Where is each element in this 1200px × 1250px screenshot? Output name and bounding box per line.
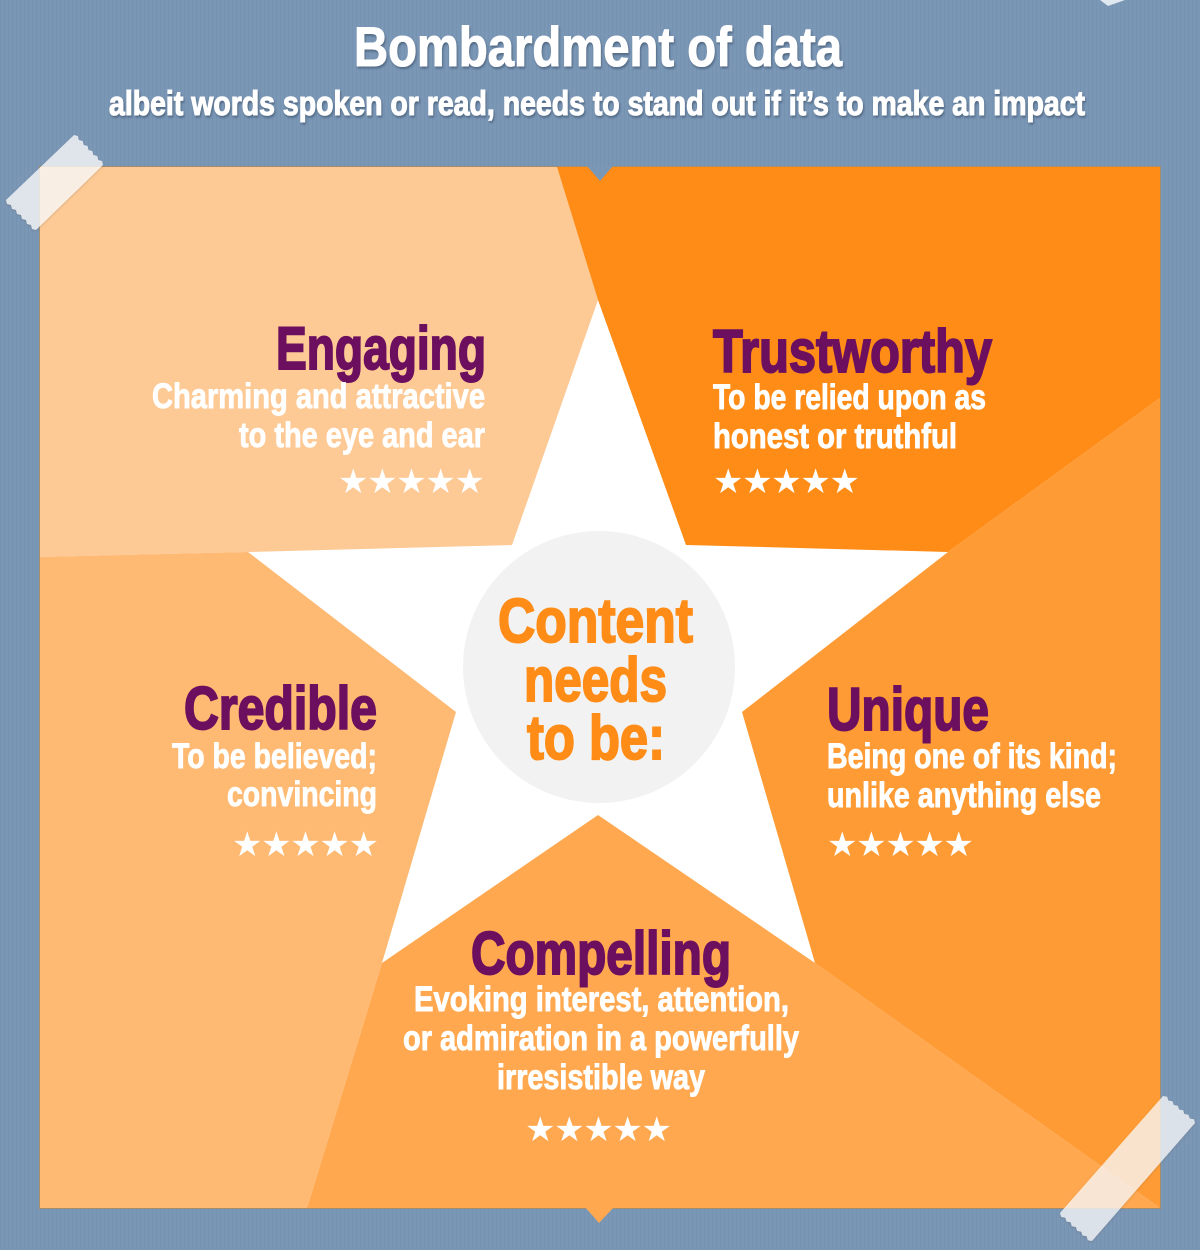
centre text: to be: <box>527 704 665 773</box>
text block: trustworthy: Trustworthy <box>713 318 993 385</box>
text block: compelling: or admiration in a powerfully <box>403 1019 799 1058</box>
icon: bottom-right tape <box>1060 1096 1195 1241</box>
text block: engaging: Engaging <box>276 315 486 382</box>
text block: compelling: Evoking interest, attention, <box>414 980 789 1019</box>
text block: trustworthy: To be relied upon as <box>713 378 986 417</box>
title: Bombardment of data <box>354 15 843 78</box>
icon: top-right tape scrap <box>1100 0 1125 6</box>
text block: unique: ★★★★★ <box>827 825 974 865</box>
centre text: Content <box>498 587 693 656</box>
panel: compelling segment <box>307 815 1160 1208</box>
text block: unique: Being one of its kind; <box>827 737 1117 776</box>
text block: trustworthy <box>713 318 993 502</box>
text block: compelling: ★★★★★ <box>525 1110 672 1150</box>
icon: top notch <box>587 166 613 181</box>
centre text <box>498 587 693 773</box>
text block: compelling: Compelling <box>471 920 731 987</box>
text block: engaging: to the eye and ear <box>239 416 485 455</box>
icon: top-left tape <box>6 135 103 230</box>
text block: trustworthy: ★★★★★ <box>713 462 860 502</box>
text block: unique: unlike anything else <box>827 776 1101 815</box>
centre circle <box>463 531 735 803</box>
text block: credible <box>172 675 379 865</box>
panel: credible segment <box>40 552 456 1208</box>
text block: unique <box>827 676 1117 865</box>
text block: engaging: Charming and attractive <box>152 377 485 416</box>
centre text: needs <box>524 646 667 715</box>
text block: credible: To be believed; <box>172 737 377 776</box>
text block: compelling: irresistible way <box>497 1058 705 1097</box>
panel: trustworthy segment <box>557 167 1160 552</box>
text block: unique: Unique <box>827 676 989 743</box>
text block: credible: Credible <box>184 675 377 742</box>
text block: credible: convincing <box>227 775 377 814</box>
text block: engaging <box>152 315 486 502</box>
text block: engaging: ★★★★★ <box>338 462 485 502</box>
panel: engaging segment <box>40 167 598 557</box>
text block: credible: ★★★★★ <box>232 825 379 865</box>
panel: star diagram <box>40 166 1160 1223</box>
text block: compelling <box>403 920 799 1150</box>
panel: unique segment <box>742 398 1160 1208</box>
text block: trustworthy: honest or truthful <box>713 417 957 456</box>
icon: bottom notch <box>585 1207 614 1223</box>
